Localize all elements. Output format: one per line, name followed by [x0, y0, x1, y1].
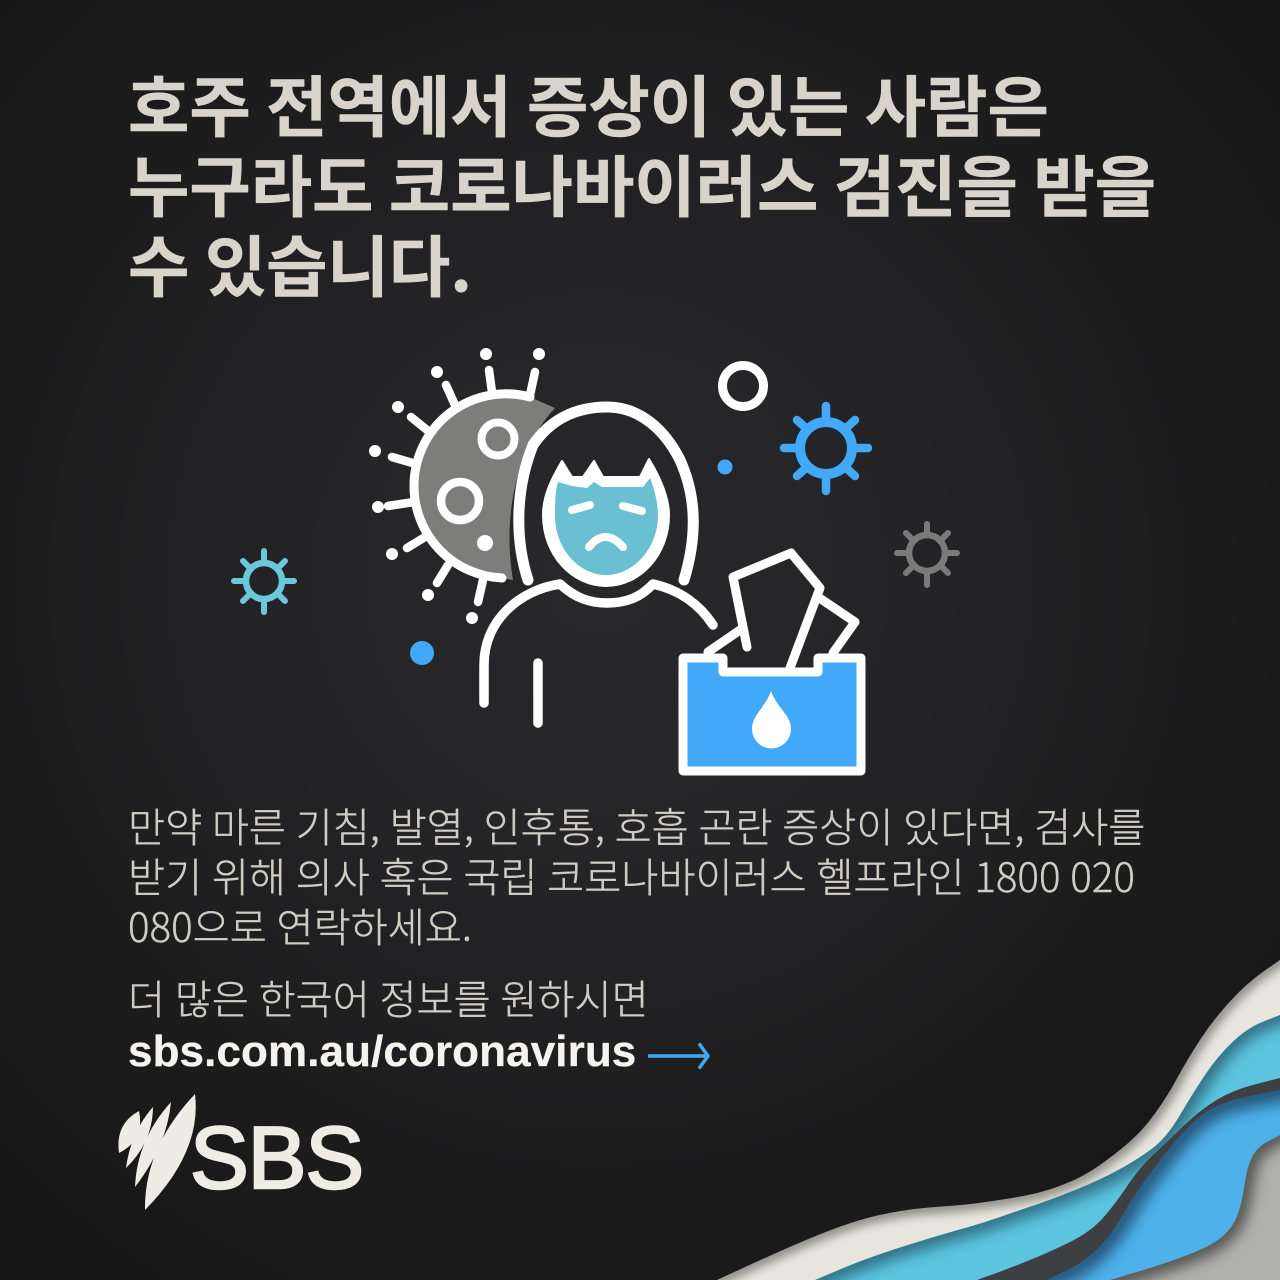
SBS logo	[118, 1094, 363, 1210]
website link: sbs.com.au/coronavirus	[128, 1027, 636, 1076]
title: 수 있습니다.	[128, 215, 472, 311]
more information text: 더 많은 한국어 정보를 원하시면	[128, 967, 649, 1026]
body text: 받기 위해 의사 혹은 국립 코로나바이러스 헬프라인 1800 020	[128, 845, 1135, 904]
icon: grey germ	[897, 524, 957, 585]
icon: tissues	[708, 553, 855, 668]
arrow	[648, 1042, 710, 1070]
body text: 080으로 연락하세요.	[128, 895, 472, 954]
icon: body	[484, 584, 713, 723]
icon: ring	[722, 366, 764, 406]
icon: blue germ	[784, 406, 868, 491]
logo mark	[118, 1094, 196, 1210]
title: 호주 전역에서 증상이 있는 사람은	[128, 55, 1049, 151]
logo wordmark: SBS	[190, 1108, 363, 1207]
icon: blue dot	[718, 460, 732, 474]
body text: 만약 마른 기침, 발열, 인후통, 호흡 곤란 증상이 있다면, 검사를	[128, 795, 1145, 854]
icon: hair	[519, 407, 693, 580]
icon: face	[543, 459, 669, 586]
title	[128, 55, 1156, 311]
icon: teal germ	[234, 551, 294, 612]
title: 누구라도 코로나바이러스 검진을 받을	[128, 135, 1156, 231]
wave decoration	[717, 960, 1280, 1280]
icon: virus	[369, 348, 555, 624]
icon: large blue dot	[410, 641, 434, 665]
icon: tissue box	[683, 658, 861, 771]
body text	[128, 795, 1145, 954]
